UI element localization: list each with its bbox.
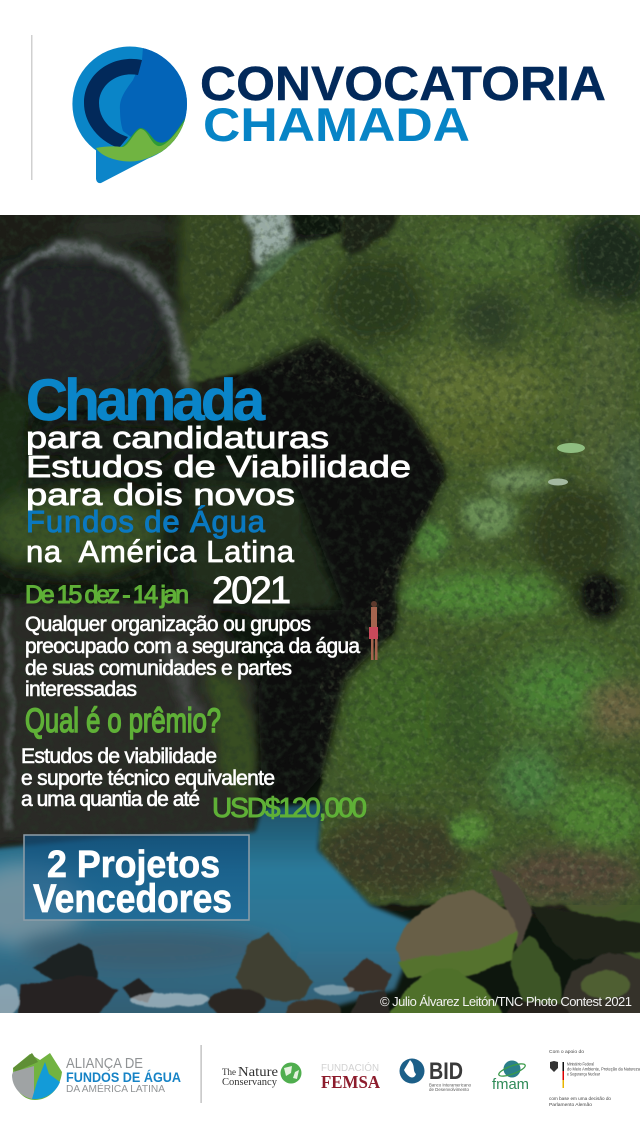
divider	[200, 1045, 202, 1103]
subtitle line: para candidaturas: para candidaturas	[26, 420, 329, 455]
dark overhang	[338, 215, 402, 256]
logo: BID: de Desenvolvimento	[429, 1087, 469, 1092]
subtitle line: para dois novos: para dois novos	[26, 477, 295, 512]
logo: The Nature Conservancy: Conservancy	[222, 1076, 277, 1088]
logo: Fundacion FEMSA: FEMSA	[321, 1072, 380, 1092]
logo: fmam	[492, 1060, 529, 1093]
moss mass	[190, 205, 640, 980]
logo: Alianca de Fundos de Agua: FUNDOS DE ÁGUA	[66, 1069, 181, 1085]
logo: The Nature Conservancy	[222, 1062, 302, 1088]
main title block	[26, 368, 411, 569]
middle left mossy rock	[180, 470, 345, 620]
white water	[130, 993, 210, 1007]
logo: German Federal Ministry	[549, 1049, 640, 1108]
logo: Fundacion FEMSA	[321, 1061, 380, 1092]
prize text: e suporte técnico equivalente	[21, 767, 275, 790]
subtitle line: na America Latina: na América Latina	[26, 534, 295, 569]
left foliage	[0, 395, 28, 555]
prize text: a uma quantia de até	[21, 788, 200, 811]
logo: Alianca de Fundos de Agua: DA AMÉRICA LATINA	[66, 1082, 165, 1095]
dates: De 15 dez - 14 jan	[25, 581, 189, 609]
logo: German Federal Ministry: Parlamento Alemão	[549, 1102, 592, 1108]
callout: 2 winning projects: 2 Projetos	[47, 844, 220, 886]
eligibility text: de suas comunidades e partes	[25, 657, 292, 680]
figure: person on ledge	[369, 601, 378, 660]
header background	[0, 0, 640, 215]
logo: BID: Banco Interamericano	[429, 1082, 471, 1088]
year 2021: 2021	[212, 570, 291, 612]
panel: photograph of mossy canyon	[0, 190, 640, 1040]
photo credit: © Julio Álvarez Leitón/TNC Photo Contest 2021	[380, 994, 632, 1009]
callout: 2 winning projects: Vencedores	[33, 877, 232, 921]
subtitle line: Fundos de Agua: Fundos de Água	[26, 504, 266, 539]
callout: 2 winning projects	[24, 835, 249, 921]
lower left rock wall	[0, 600, 258, 845]
logo: German Federal Ministry: Com o apoio do	[549, 1049, 584, 1055]
header vertical rule	[31, 35, 32, 180]
logo: BID	[400, 1058, 471, 1092]
prize text: Estudos de viabilidade	[21, 745, 217, 768]
eligibility text	[25, 613, 360, 701]
logo: Alianca de Fundos de Agua	[12, 1053, 181, 1100]
prize amount: USD$120,000	[212, 792, 367, 823]
title: Chamada: Chamada	[26, 368, 266, 433]
waterfall upper	[50, 248, 188, 385]
eligibility text: Qualquer organização ou grupos	[25, 613, 311, 636]
prize text	[21, 745, 275, 811]
logo: BID: BID	[429, 1058, 463, 1085]
logo: The Nature Conservancy: The	[222, 1067, 236, 1077]
heading: CHAMADA: CHAMADA	[203, 98, 470, 151]
question heading: Qual é o prêmio?	[25, 702, 221, 740]
logo: German Federal Ministry: com base em uma decisão do	[549, 1096, 611, 1102]
subtitle line: Estudos de Viabilidade: Estudos de Viabilidade	[26, 449, 411, 484]
boulders	[0, 868, 640, 1025]
mist opening	[243, 205, 292, 268]
logo: Alianca de Fundos de Agua: ALIANÇA DE	[66, 1055, 143, 1072]
water pool	[0, 803, 420, 1030]
eligibility text: interessadas	[25, 678, 137, 701]
moss grain	[0, 215, 640, 905]
logo: fmam: fmam	[492, 1076, 529, 1093]
icon: speech bubble logo	[72, 40, 190, 183]
cave darkness	[225, 338, 447, 800]
fern leaves	[548, 443, 585, 486]
logo: German Federal Ministry: Ministério Federal	[567, 1062, 594, 1066]
logo: The Nature Conservancy: Nature	[238, 1065, 278, 1080]
logo: German Federal Ministry: e Segurança Nuclear	[567, 1072, 600, 1076]
logo: Fundacion FEMSA: FUNDACIÓN	[321, 1061, 379, 1074]
eligibility text: preocupado com a segurança da água	[25, 635, 360, 658]
heading: CONVOCATORIA: CONVOCATORIA	[200, 58, 606, 111]
upper left dark rock	[0, 215, 252, 414]
